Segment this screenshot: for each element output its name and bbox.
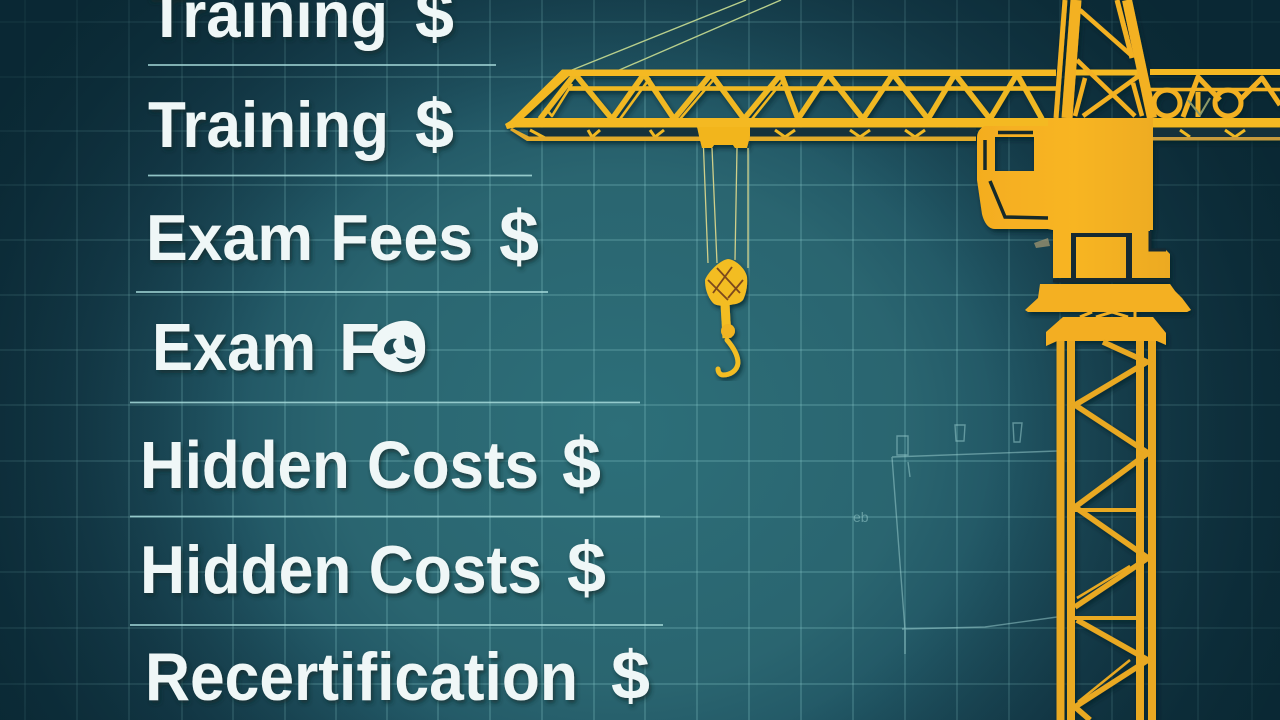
- slewing platform: [1025, 284, 1191, 312]
- row: Hidden Costs: $: [562, 424, 601, 504]
- cost list: [140, 0, 650, 715]
- boom chords: [505, 69, 1280, 141]
- row: Training: $: [415, 85, 454, 163]
- row: Training: Training: [148, 88, 389, 161]
- dark band under boom: [528, 128, 1280, 137]
- mast head: [1056, 0, 1280, 118]
- row: Hidden Costs: Hidden Costs: [140, 428, 539, 503]
- row: Hidden Costs (repeat): Hidden Costs: [140, 532, 542, 608]
- crane: [505, 0, 1280, 720]
- operator cab and machinery house: [977, 118, 1170, 282]
- sketch annotation: eb: [853, 509, 869, 525]
- boom truss web: [530, 74, 1245, 138]
- blueprint sketch: [853, 423, 1057, 654]
- grease smudge: [1034, 238, 1050, 248]
- trolley: [697, 127, 750, 148]
- garbled glyph blob: [372, 321, 425, 372]
- tower mast: [1060, 341, 1152, 720]
- hook block and hook: [705, 259, 747, 375]
- separator lines: [130, 65, 663, 625]
- row: Exam Fees: Exam Fees: [146, 201, 473, 274]
- row: Recertification: $: [611, 637, 650, 714]
- row: Hidden Costs (repeat): $: [567, 529, 606, 608]
- row: Recertification: Recertification: [145, 639, 578, 715]
- row: Exam Fees: $: [499, 197, 539, 277]
- right truss rings: [1154, 77, 1280, 117]
- row: Exam Fees (garbled): F: [339, 310, 380, 385]
- row: Exam Fees (garbled): Exam: [152, 310, 316, 385]
- hoist cables: [704, 148, 748, 268]
- stay cables: [567, 0, 781, 72]
- row: Exam Fees (garbled): [152, 310, 425, 385]
- lower platform: [1046, 317, 1166, 346]
- platform struts: [1080, 310, 1135, 318]
